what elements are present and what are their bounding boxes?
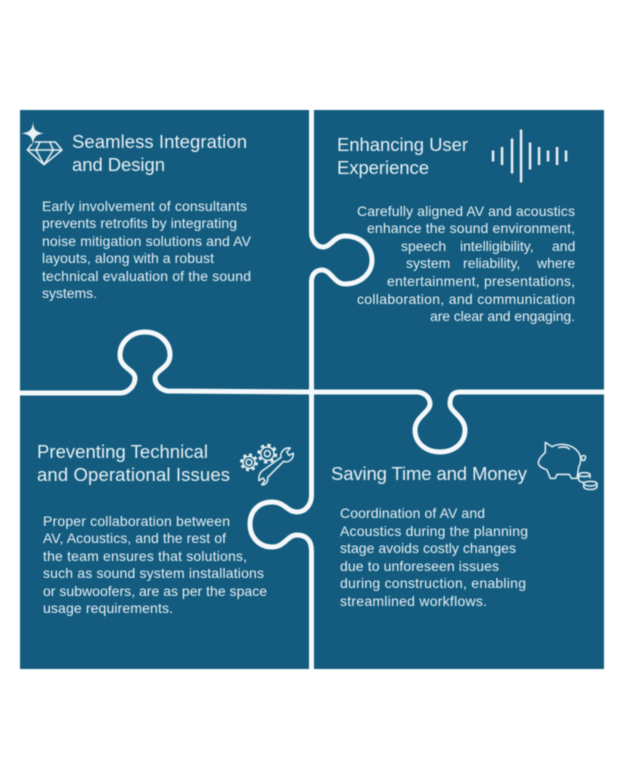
text block: seamless integration body: technical evaluation of the sound [42, 268, 251, 284]
text block: seamless integration body [42, 198, 252, 301]
text block: enhancing user experience body: enhance the sound environment, [367, 220, 575, 236]
puzzle piece seams [20, 110, 604, 669]
text block: enhancing user experience body: collaboration, and communication [357, 291, 575, 307]
heading: saving time and money: Saving Time and Money [331, 463, 528, 484]
text block: enhancing user experience body: entertainment, presentations, [387, 273, 575, 289]
text block: preventing technical body: or subwoofers, are as per the space [43, 583, 267, 599]
text block: seamless integration body: systems. [42, 285, 97, 301]
text block: enhancing user experience body: system [406, 255, 450, 271]
text block: saving time and money body: during construction, enabling [340, 575, 526, 591]
text block: saving time and money body: stage avoids costly changes [340, 540, 516, 556]
text block: enhancing user experience body: and [552, 238, 575, 254]
heading: preventing technical and operational issues [37, 441, 230, 485]
heading: enhancing user experience: Experience [337, 157, 429, 178]
panel: saving time and money [250, 392, 604, 669]
heading: seamless integration and design: Seamless Integration [72, 131, 247, 152]
heading: preventing technical and operational issues: Preventing Technical [37, 441, 208, 462]
text block: preventing technical body: usage requirements. [43, 600, 173, 616]
panel: enhancing user experience [312, 110, 604, 452]
panel: seamless integration and design [20, 110, 372, 393]
text block: saving time and money body: Acoustics during the planning [340, 523, 528, 539]
text block: saving time and money body: due to unforeseen issues [340, 558, 499, 574]
text block: seamless integration body: Early involvement of consultants [42, 198, 247, 214]
icon: gears and wrench [241, 445, 293, 485]
heading: enhancing user experience [337, 134, 468, 178]
text block: saving time and money body [340, 505, 528, 609]
icon: sound waveform [492, 130, 567, 182]
text block: seamless integration body: noise mitigation solutions and AV [42, 233, 252, 249]
text block: enhancing user experience body: where [536, 255, 575, 271]
text block: preventing technical body [43, 513, 267, 616]
panel: preventing technical and operational issues [20, 332, 312, 669]
text block: seamless integration body: prevents retrofits by integrating [42, 215, 237, 231]
text block: enhancing user experience body: intelligibility, [460, 238, 534, 254]
text block: enhancing user experience body [357, 203, 575, 324]
text block: saving time and money body: Coordination of AV and [340, 505, 485, 521]
text block: seamless integration body: layouts, along with a robust [42, 250, 214, 266]
text block: enhancing user experience body: reliability, [463, 255, 520, 271]
text block: preventing technical body: such as sound system installations [43, 565, 264, 581]
heading: enhancing user experience: Enhancing User [337, 134, 468, 155]
text block: enhancing user experience body: Carefully aligned AV and acoustics [357, 203, 575, 219]
heading: seamless integration and design: and Design [72, 154, 165, 175]
text block: preventing technical body: Proper collaboration between [43, 513, 230, 529]
text block: enhancing user experience body: speech [401, 238, 446, 254]
text block: preventing technical body: the team ensures that solutions, [43, 548, 247, 564]
icon: piggy bank with coins [538, 442, 597, 489]
heading: preventing technical and operational issues: and Operational Issues [37, 464, 230, 485]
text block: enhancing user experience body: are clear and engaging. [430, 308, 575, 324]
heading: seamless integration and design [72, 131, 247, 175]
icon: diamond with sparkle [21, 122, 62, 165]
text block: preventing technical body: AV, Acoustics, and the rest of [43, 530, 226, 546]
text block: saving time and money body: streamlined workflows. [340, 593, 487, 609]
